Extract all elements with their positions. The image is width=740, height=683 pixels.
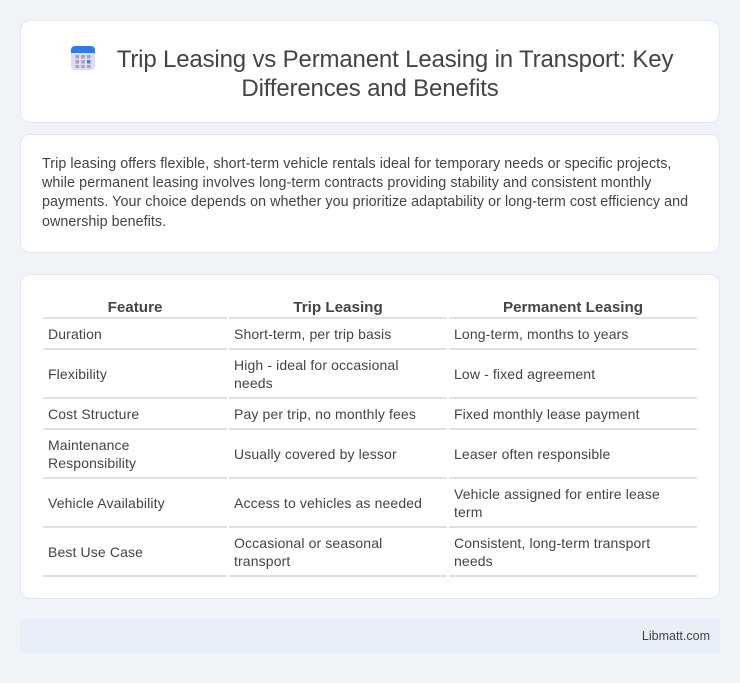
intro text: ownership benefits.: [42, 214, 166, 230]
row: flexibility: [48, 357, 596, 391]
row: maintenance responsibility: [48, 437, 610, 471]
intro panel: [20, 134, 720, 253]
title: [117, 46, 674, 102]
table header: [108, 299, 643, 316]
row: flexibility: Flexibility: [48, 366, 107, 382]
row: cost structure: Cost Structure: [48, 406, 139, 422]
row: duration: [48, 326, 629, 342]
title: Trip Leasing vs Permanent Leasing in Transport: Key: [117, 46, 673, 73]
row: flexibility: needs: [234, 375, 273, 391]
row: maintenance responsibility: Usually covered by lessor: [234, 446, 397, 462]
row: vehicle availability: [48, 486, 660, 520]
row: vehicle availability: Vehicle Availability: [48, 495, 165, 511]
row: best use case: transport: [234, 553, 290, 569]
icon: calendar: [71, 46, 95, 70]
table header: Feature: [108, 299, 162, 316]
row: vehicle availability: term: [454, 504, 483, 520]
title: Differences and Benefits: [241, 75, 499, 102]
intro text: [42, 156, 688, 230]
row: maintenance responsibility: Maintenance: [48, 437, 130, 453]
row: best use case: Best Use Case: [48, 544, 143, 560]
row: duration: Long-term, months to years: [454, 326, 629, 342]
row: maintenance responsibility: Leaser often responsible: [454, 446, 610, 462]
row: cost structure: Fixed monthly lease payment: [454, 406, 640, 422]
row: best use case: Consistent, long-term transport: [454, 535, 650, 551]
row: flexibility: Low - fixed agreement: [454, 366, 595, 382]
footer text: Libmatt.com: [642, 629, 710, 643]
row: duration: Duration: [48, 326, 102, 342]
footer bar: [20, 619, 720, 653]
intro text: Trip leasing offers flexible, short-term vehicle rentals ideal for temporary needs or specific projects,: [42, 156, 671, 172]
intro text: payments. Your choice depends on whether you prioritize adaptability or long-term cost efficiency and: [42, 194, 688, 210]
row: cost structure: Pay per trip, no monthly fees: [234, 406, 416, 422]
comparison table: [43, 299, 697, 577]
row: vehicle availability: Access to vehicles as needed: [234, 495, 422, 511]
row: maintenance responsibility: Responsibility: [48, 455, 136, 471]
table header: Permanent Leasing: [503, 299, 643, 316]
row: duration: Short-term, per trip basis: [234, 326, 391, 342]
row: cost structure: [48, 406, 640, 422]
header panel: [20, 20, 720, 123]
row: best use case: [48, 535, 650, 569]
row: vehicle availability: Vehicle assigned for entire lease: [454, 486, 660, 502]
row: best use case: Occasional or seasonal: [234, 535, 382, 551]
row: flexibility: High - ideal for occasional: [234, 357, 399, 373]
table panel: [20, 274, 720, 599]
table header: Trip Leasing: [293, 299, 383, 316]
intro text: while permanent leasing involves long-term contracts providing stability and consistent monthly: [42, 175, 651, 191]
row: best use case: needs: [454, 553, 493, 569]
